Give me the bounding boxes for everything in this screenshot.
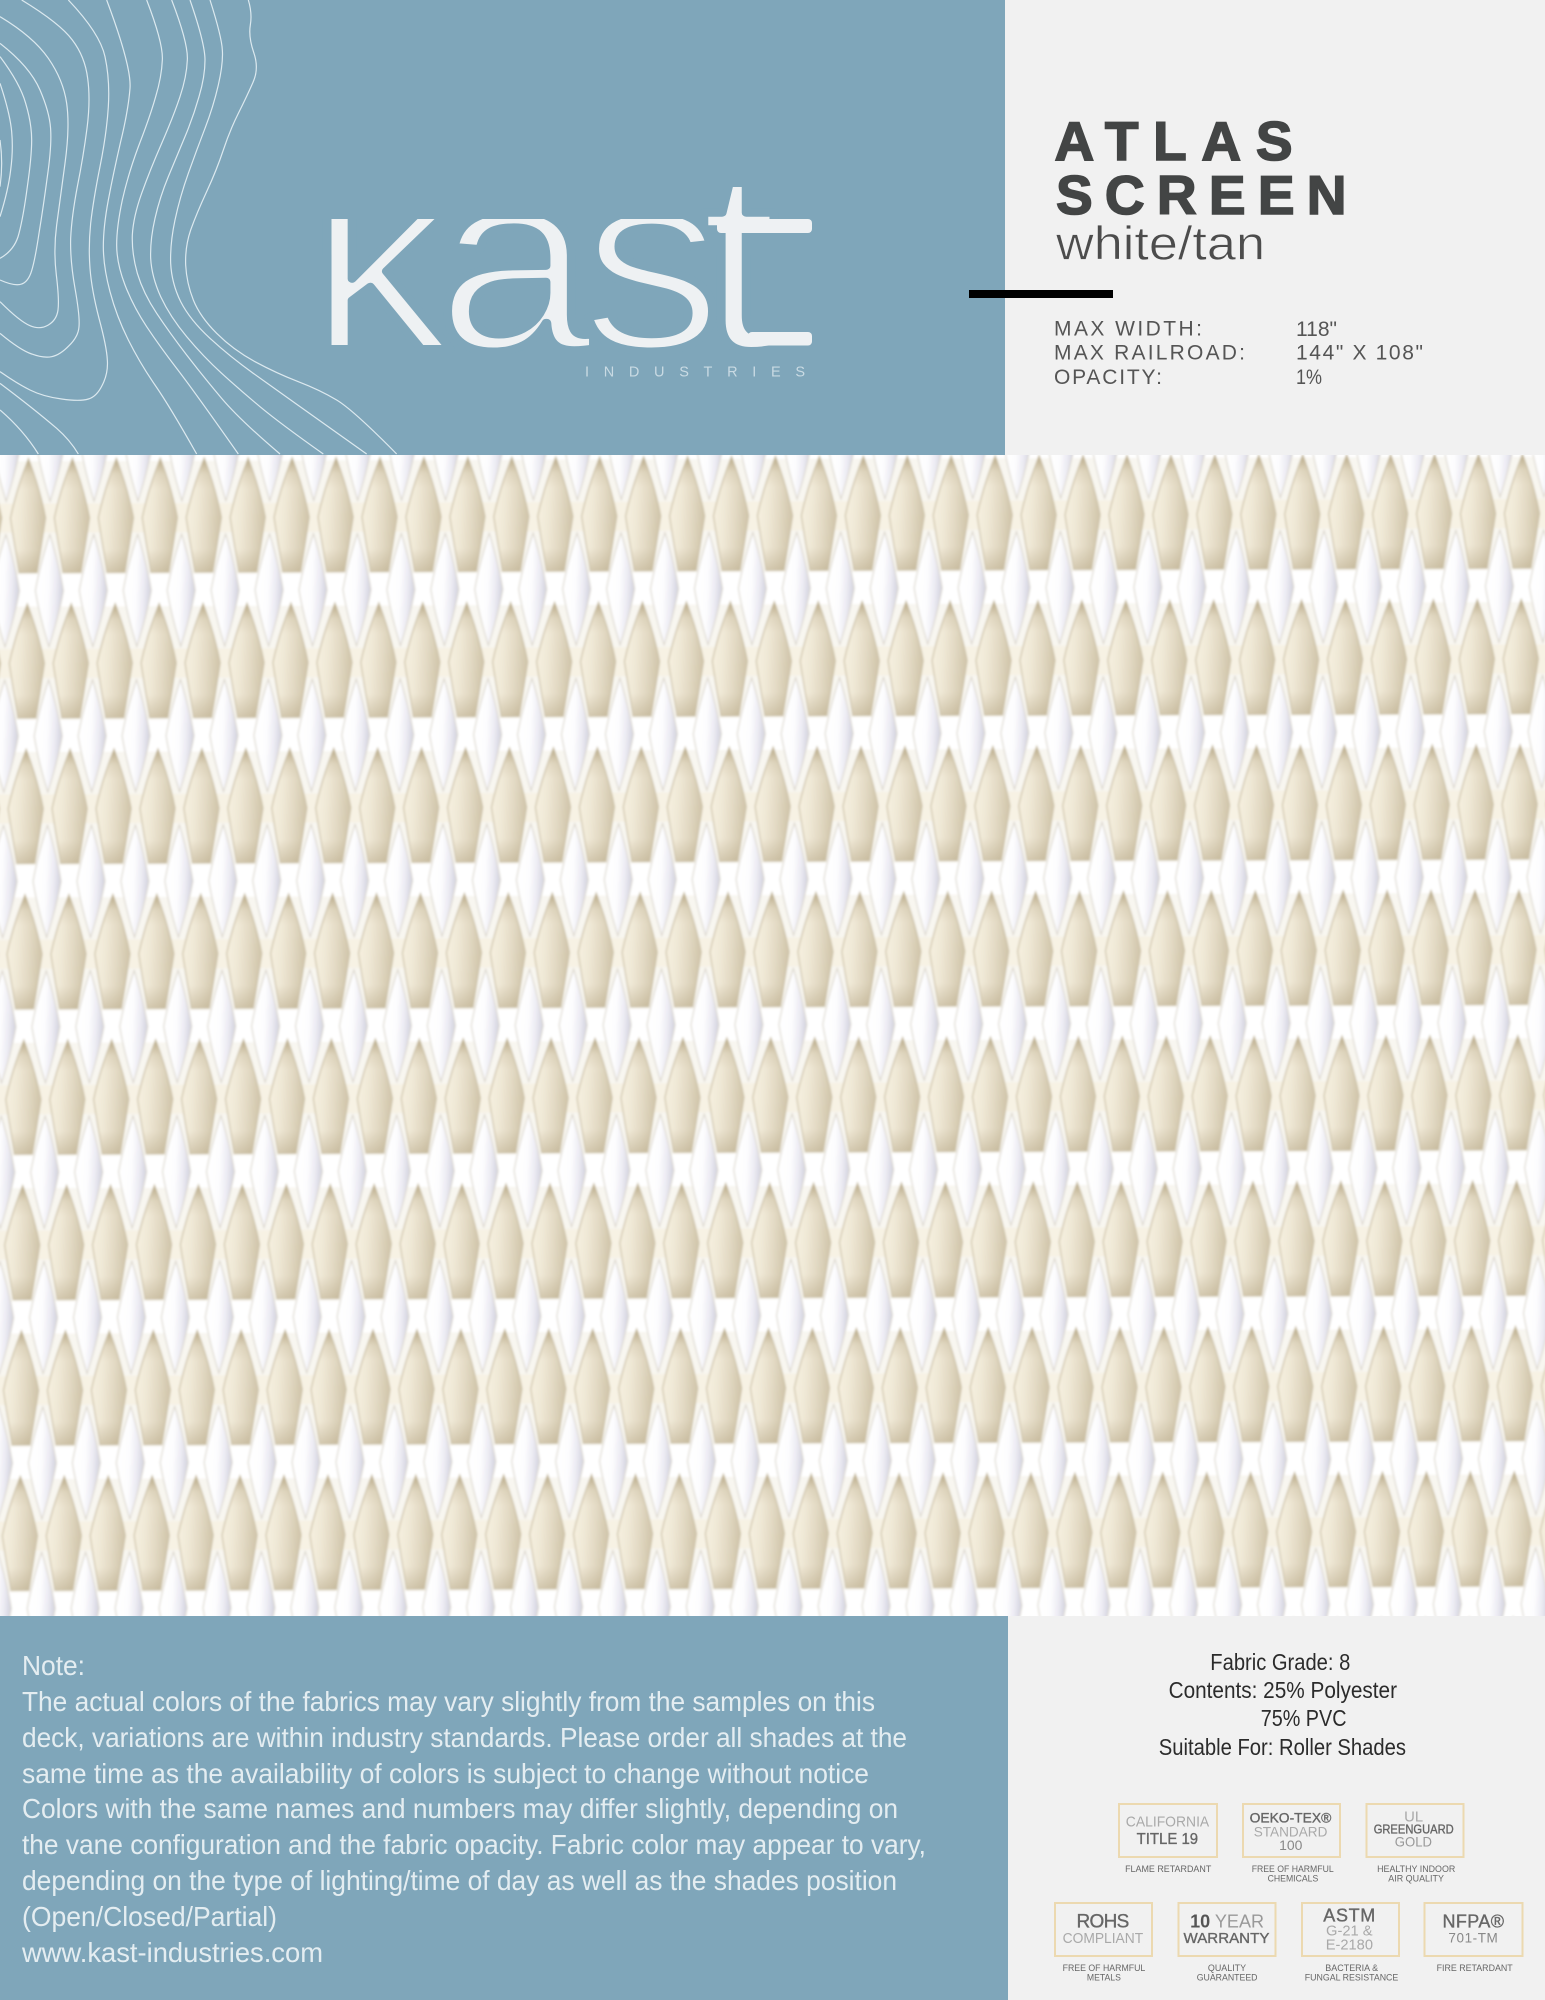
note text: www.kast-industries.com <box>21 1937 323 1968</box>
note text: deck, variations are within industry standards. Please order all shades at the <box>22 1722 907 1753</box>
panel: note <box>0 1616 1008 2000</box>
badge: NFPA 701-TM: FIRE RETARDANT <box>1437 1963 1513 1974</box>
badge: UL Greenguard Gold: GOLD <box>1395 1834 1432 1850</box>
badge: Oeko-Tex Standard 100 <box>1243 1804 1340 1885</box>
note text: (Open/Closed/Partial) <box>22 1901 277 1932</box>
badge: UL Greenguard Gold <box>1366 1804 1464 1885</box>
badge: ASTM G-21 and E-2180 <box>1302 1903 1399 1984</box>
badge: RoHS compliant: METALS <box>1087 1973 1121 1984</box>
note text: Note: <box>22 1650 85 1681</box>
topographic contour lines <box>0 0 397 454</box>
badge: ASTM G-21 and E-2180: E-2180 <box>1326 1936 1373 1953</box>
product title: atlas screen <box>1054 110 1346 226</box>
badge: 10 year warranty: WARRANTY <box>1184 1930 1269 1947</box>
badge: California Title 19: FLAME RETARDANT <box>1125 1864 1211 1875</box>
fabric details text: Fabric Grade: 8 <box>1210 1649 1350 1675</box>
badge: 10 year warranty: GUARANTEED <box>1197 1973 1258 1984</box>
product colour: white/tan: white/tan <box>1055 216 1265 270</box>
logo: kast <box>332 187 812 348</box>
badge: California Title 19 <box>1119 1804 1217 1875</box>
specifications: 144" X 108" <box>1296 342 1423 364</box>
note text: the vane configuration and the fabric opacity. Fabric color may appear to vary, <box>22 1829 926 1860</box>
badge: 10 year warranty <box>1178 1903 1276 1984</box>
badge: UL Greenguard Gold: AIR QUALITY <box>1388 1874 1445 1885</box>
product title: atlas screen: SCREEN <box>1056 164 1346 226</box>
badge: RoHS compliant: ROHS <box>1076 1912 1129 1933</box>
badge: California Title 19: TITLE 19 <box>1137 1831 1198 1848</box>
specifications: OPACITY: <box>1054 366 1162 389</box>
product title: atlas screen: ATLAS <box>1054 110 1292 172</box>
badge: ASTM G-21 and E-2180: FUNGAL RESISTANCE <box>1305 1973 1398 1984</box>
badge: 10 year warranty: 10 YEAR <box>1190 1911 1264 1932</box>
badge: RoHS compliant: COMPLIANT <box>1063 1931 1143 1947</box>
fabric details text: Contents: 25% Polyester <box>1169 1677 1397 1703</box>
fabric details text: Suitable For: Roller Shades <box>1159 1734 1406 1760</box>
fabric details text <box>1159 1649 1406 1760</box>
fabric swatch: woven white and tan texture <box>0 450 1545 1621</box>
badge: NFPA 701-TM: NFPA® <box>1442 1912 1504 1932</box>
note text: same time as the availability of colors is subject to change without notice <box>22 1758 869 1789</box>
badge: ASTM G-21 and E-2180: BACTERIA & <box>1325 1963 1379 1974</box>
logo: kast: kast <box>308 116 779 404</box>
specifications: 118" <box>1296 318 1337 341</box>
specifications <box>1054 318 1423 389</box>
badge: 10 year warranty: QUALITY <box>1208 1963 1247 1974</box>
badge: RoHS compliant <box>1055 1903 1152 1984</box>
badge: California Title 19: CALIFORNIA <box>1126 1815 1210 1831</box>
badge: Oeko-Tex Standard 100: CHEMICALS <box>1268 1874 1318 1885</box>
badge: Oeko-Tex Standard 100: STANDARD <box>1254 1825 1328 1840</box>
badge: ASTM G-21 and E-2180: ASTM <box>1323 1906 1375 1926</box>
badge: NFPA 701-TM: 701-TM <box>1448 1931 1498 1946</box>
logo subtitle: industries: INDUSTRIES <box>585 364 805 380</box>
note text: depending on the type of lighting/time of day as well as the shades position <box>22 1865 897 1896</box>
panel: blue header <box>0 0 1005 455</box>
fabric details text: 75% PVC <box>1261 1705 1346 1731</box>
badge: UL Greenguard Gold: GREENGUARD <box>1374 1822 1454 1836</box>
note text: The actual colors of the fabrics may vary slightly from the samples on this <box>22 1686 875 1717</box>
badge: Oeko-Tex Standard 100: FREE OF HARMFUL <box>1252 1864 1334 1875</box>
note text <box>21 1650 926 1968</box>
title divider bar <box>969 290 1113 298</box>
specifications: MAX WIDTH: <box>1054 318 1202 340</box>
badge: RoHS compliant: FREE OF HARMFUL <box>1063 1963 1145 1974</box>
badge: UL Greenguard Gold: HEALTHY INDOOR <box>1377 1864 1455 1875</box>
note text: Colors with the same names and numbers may differ slightly, depending on <box>22 1793 898 1824</box>
specifications: 1% <box>1296 366 1322 389</box>
badge: ASTM G-21 and E-2180: G-21 & <box>1326 1923 1373 1940</box>
badge: Oeko-Tex Standard 100: 100 <box>1279 1838 1302 1853</box>
specifications: MAX RAILROAD: <box>1054 342 1245 364</box>
badge: Oeko-Tex Standard 100: OEKO-TEX® <box>1250 1810 1332 1826</box>
badge: UL Greenguard Gold: UL <box>1404 1810 1423 1826</box>
badge: NFPA 701-TM <box>1424 1903 1522 1974</box>
